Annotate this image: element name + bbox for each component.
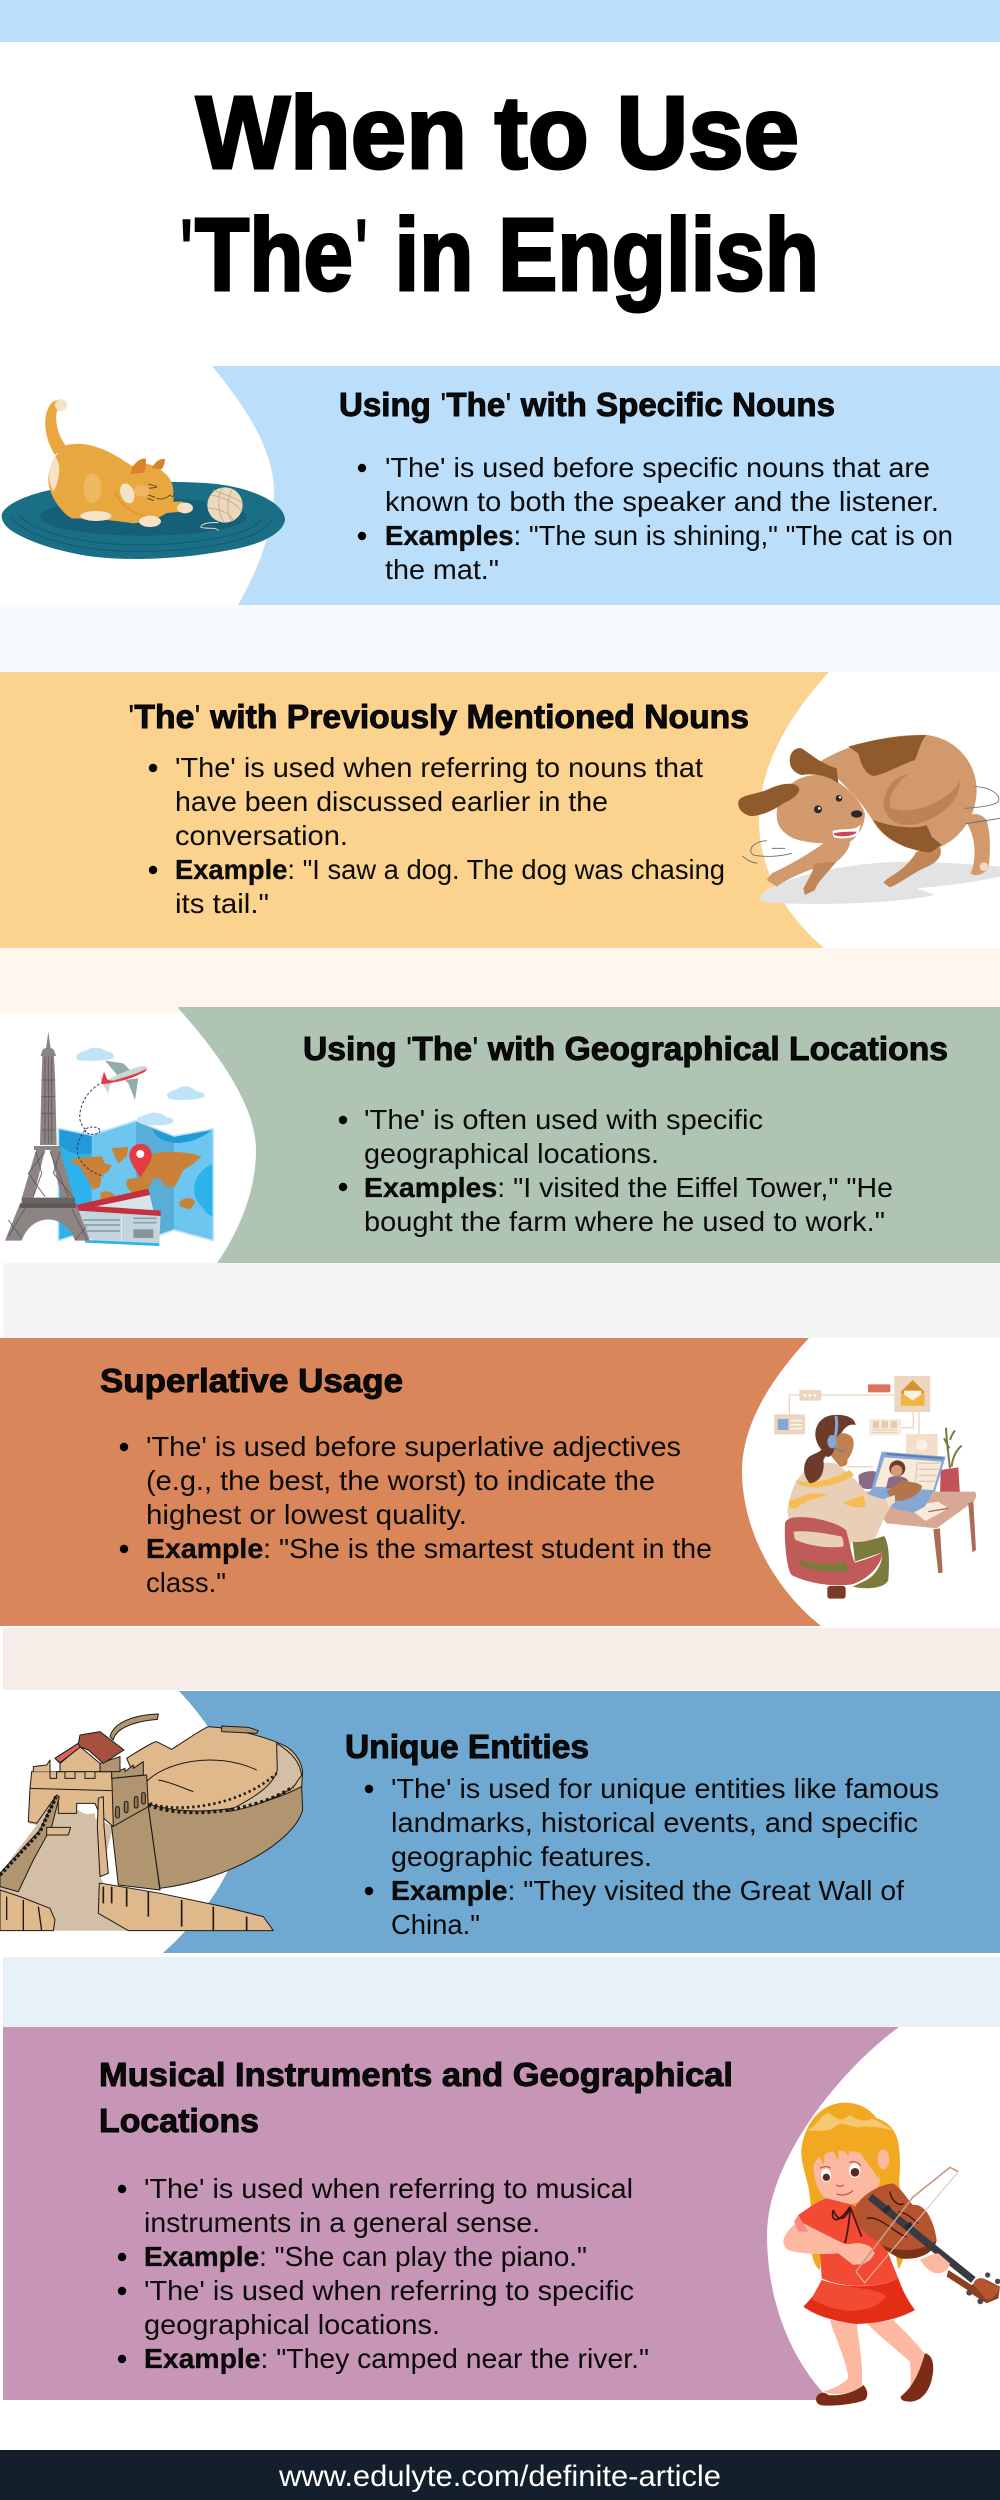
bullet list: Examples: "I visited the Eiffel Tower," "He: [364, 1172, 893, 1203]
bullet list: 'The' is used before specific nouns that are: [385, 452, 930, 483]
bullet list: 'The' is often used with specific: [364, 1104, 763, 1135]
bullet list: known to both the speaker and the listener.: [385, 486, 939, 517]
footer: www.edulyte.com/definite-article: [278, 2460, 721, 2493]
panel: specific nouns: [0, 366, 1000, 672]
icon: Great Wall of China: [0, 1714, 303, 1931]
heading: Using 'The' with Specific Nouns: [339, 386, 835, 423]
bullet list: [149, 752, 725, 919]
panel: unique entities: [0, 1691, 1000, 2027]
bullet list: 'The' is used before superlative adjectives: [146, 1431, 681, 1462]
bullet list: conversation.: [175, 820, 348, 851]
bullet list: have been discussed earlier in the: [175, 786, 608, 817]
bullet list: Example: "They camped near the river.": [144, 2343, 649, 2374]
icon: girl playing violin: [783, 2103, 1000, 2406]
bullet list: Example: "She is the smartest student in the: [146, 1533, 712, 1564]
bullet list: geographic features.: [391, 1841, 652, 1872]
panel: superlative usage: [0, 1338, 1000, 1690]
bullet list: Example: "She can play the piano.": [144, 2241, 587, 2272]
icon: cat on rug with yarn: [2, 399, 285, 559]
heading: 'The' with Previously Mentioned Nouns: [128, 698, 749, 735]
bullet list: [339, 1104, 893, 1237]
top banner: [0, 0, 1000, 42]
panel: previously mentioned nouns: [0, 672, 1000, 1013]
bullet list: bought the farm where he used to work.": [364, 1206, 885, 1237]
bullet list: Example: "They visited the Great Wall of: [391, 1875, 904, 1906]
heading: Using 'The' with Geographical Locations: [303, 1030, 948, 1067]
bullet list: China.": [391, 1909, 480, 1940]
bullet list: Example: "I saw a dog. The dog was chasing: [175, 854, 725, 885]
icon: woman on video call at desk: [774, 1376, 976, 1599]
title: [178, 75, 819, 312]
panel: musical instruments and geographical locations: [3, 2027, 1000, 2406]
bullet list: landmarks, historical events, and specific: [391, 1807, 918, 1838]
heading: [99, 2056, 733, 2139]
bullet list: Examples: "The sun is shining," "The cat is on: [385, 520, 953, 551]
heading: Locations: [99, 2102, 259, 2139]
bullet list: geographical locations.: [144, 2309, 440, 2340]
bullet list: the mat.": [385, 554, 499, 585]
bullet list: (e.g., the best, the worst) to indicate the: [146, 1465, 655, 1496]
icon: Eiffel Tower, plane and map: [5, 1032, 213, 1246]
heading: Superlative Usage: [100, 1362, 403, 1399]
footer: [0, 2450, 1000, 2500]
bullet list: class.": [146, 1567, 226, 1598]
heading: Musical Instruments and Geographical: [99, 2056, 733, 2093]
heading: Unique Entities: [345, 1728, 589, 1765]
bullet list: [365, 1773, 939, 1940]
title: When to Use: [196, 75, 799, 190]
icon: dog chasing tail: [738, 735, 1000, 904]
bullet list: its tail.": [175, 888, 269, 919]
bullet list: highest or lowest quality.: [146, 1499, 467, 1530]
bullet list: 'The' is used when referring to musical: [144, 2173, 633, 2204]
bullet list: instruments in a general sense.: [144, 2207, 540, 2238]
title: 'The' in English: [178, 197, 819, 312]
bullet list: 'The' is used when referring to nouns that: [175, 752, 703, 783]
bullet list: [118, 2173, 649, 2374]
bullet list: [120, 1431, 712, 1598]
bullet list: geographical locations.: [364, 1138, 659, 1169]
panel: geographical locations: [0, 1007, 1000, 1338]
bullet list: [358, 452, 953, 585]
bullet list: 'The' is used for unique entities like famous: [391, 1773, 939, 1804]
bullet list: 'The' is used when referring to specific: [144, 2275, 634, 2306]
